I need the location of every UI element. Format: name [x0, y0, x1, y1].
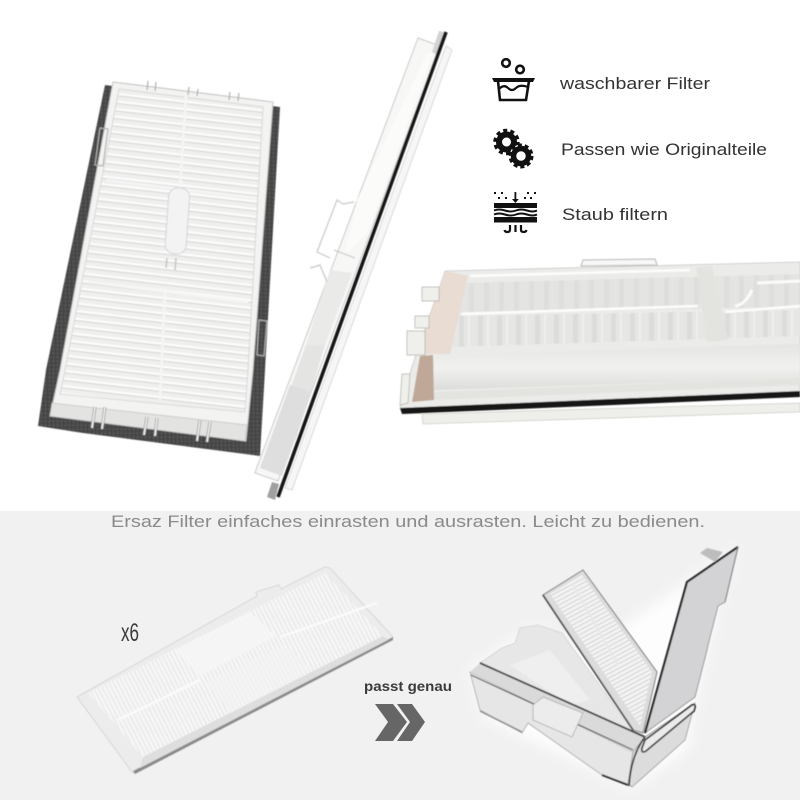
- bottom panel background: [0, 511, 800, 800]
- inner clear wall: [306, 270, 352, 345]
- feature row: filters dust: [494, 192, 668, 232]
- main body: [400, 262, 800, 409]
- product photo: filter close-up: [400, 259, 800, 424]
- lower clear strip: [422, 403, 800, 424]
- dark lower edge: [133, 637, 393, 774]
- centre grip: [165, 187, 190, 270]
- icon: dust filter layers: [494, 192, 537, 232]
- amber corner: [417, 271, 468, 354]
- label: washable filter: waschbarer Filter: [559, 74, 710, 93]
- product photo: dustbin with open lid: [470, 547, 738, 788]
- bottom clips: [92, 407, 210, 442]
- product photo: flat filter front view: [38, 81, 280, 456]
- icon: gears: [495, 130, 532, 168]
- quantity label: x6: [121, 619, 139, 647]
- filter ribs: [88, 96, 257, 400]
- product photo: single filter: [77, 567, 393, 774]
- white ribs: [118, 603, 377, 720]
- feature row: washable: [492, 59, 710, 100]
- label: filters dust: Staub filtern: [562, 205, 668, 224]
- label: fits like original parts: Passen wie Originalteile: [561, 140, 767, 159]
- lower edge marks: [480, 711, 522, 732]
- upper pleat band: [459, 274, 800, 312]
- frame: [77, 567, 393, 773]
- pleated surface: [88, 573, 383, 757]
- bin rim: [470, 663, 645, 752]
- pleated filter surface: [60, 89, 263, 412]
- icon: wash basin: [492, 59, 535, 100]
- product photo: filter side view: [255, 31, 452, 500]
- lower pleat band: [452, 310, 800, 347]
- bright highlight curve: [735, 281, 800, 306]
- bin side: [628, 703, 695, 787]
- lid: [645, 547, 738, 733]
- thin clear back plate: [285, 46, 452, 490]
- top clips and side latches: [95, 81, 267, 356]
- bottom stub: [267, 482, 279, 500]
- black gasket: [400, 391, 800, 414]
- filter standing in bin: [543, 570, 657, 733]
- caption: Ersaz Filter einfaches einrasten und ausrasten. Leicht zu bedienen.: [111, 513, 705, 531]
- side clips: [400, 287, 439, 405]
- white ribs: [462, 270, 800, 314]
- label: fits exactly: passt genau: [364, 678, 452, 694]
- rib block: [696, 266, 728, 342]
- top stub: [432, 31, 444, 55]
- arrow: double chevron: [375, 704, 425, 741]
- lid tab: [700, 548, 723, 562]
- front channel: [434, 344, 800, 390]
- side ledge: [140, 636, 388, 768]
- clear plastic frame: [50, 82, 273, 441]
- side tabs: [310, 200, 355, 282]
- lower clear lip: [50, 403, 247, 441]
- bin front wall: [470, 672, 633, 784]
- latch: [533, 697, 583, 737]
- tab on top: [581, 259, 657, 266]
- white halo: [470, 547, 738, 788]
- bin interior: [480, 625, 645, 737]
- felt backing: [38, 85, 280, 456]
- feature row: fits like original: [495, 130, 767, 168]
- black gasket: [278, 32, 446, 497]
- clear body: [255, 38, 440, 481]
